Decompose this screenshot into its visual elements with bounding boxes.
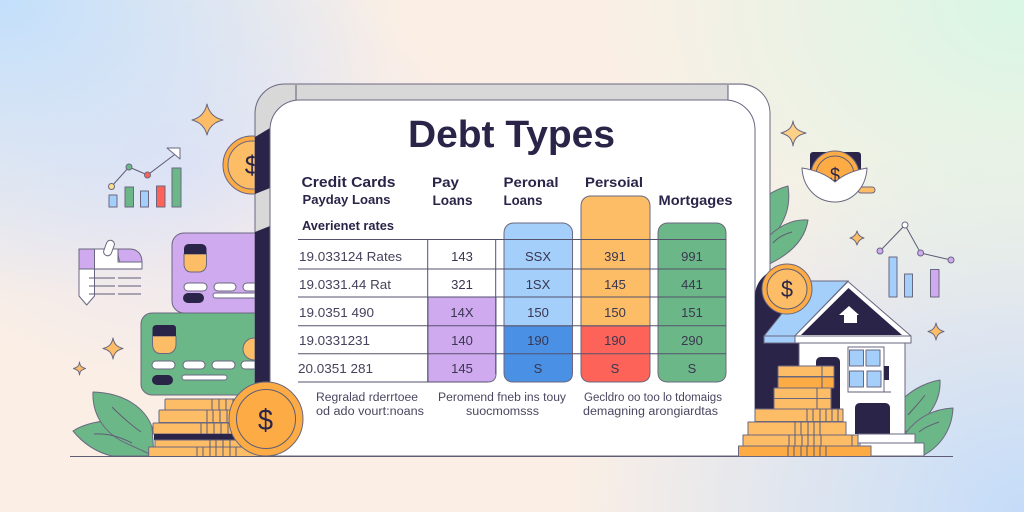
sparkle: left medium — [103, 338, 123, 359]
chart: left bars with trend arrow — [108, 148, 181, 207]
table column headers — [302, 174, 733, 233]
purple credit card — [172, 233, 282, 313]
footnote: left: od ado vourt:noans — [316, 406, 424, 418]
house gable — [795, 282, 911, 343]
table values: mortgages — [681, 249, 703, 376]
table values: pay loans: 14X — [450, 305, 474, 320]
leaves: right upper, behind panel — [760, 186, 808, 266]
table column headers: Credit Cards — [302, 175, 396, 191]
green credit card — [141, 313, 281, 395]
table values: personal: S — [611, 361, 620, 376]
house body — [799, 343, 905, 435]
icon: coin in bowl — [802, 151, 875, 202]
coin behind panel — [223, 136, 281, 194]
icon: notebook with pencil — [79, 239, 142, 305]
table column headers: Payday Loans — [302, 192, 390, 207]
footnote: right: Gecldro oo too lo tdomaigs — [584, 392, 722, 404]
sparkle: lower right — [928, 323, 944, 340]
table values: mortgages: 290 — [681, 333, 703, 348]
table values: mortgages: S — [688, 361, 697, 376]
table row labels: 19.0351 490 — [299, 305, 374, 320]
table values: mortgages: 991 — [681, 249, 703, 264]
table values: personal: 150 — [604, 305, 626, 320]
table row labels: 19.0331231 — [299, 333, 370, 348]
coin behind panel: $ — [245, 150, 260, 180]
footnote: right: demagning arongiardtas — [583, 406, 718, 418]
icon: coin in bowl: $ — [830, 165, 840, 187]
footnote: centre: Peromend fneb ins touy — [438, 392, 566, 404]
sparkle: top right — [781, 121, 806, 146]
footnote: centre — [438, 392, 566, 418]
table values: personal: 190 — [604, 333, 626, 348]
table values: personal loans: 150 — [527, 305, 549, 320]
table values: pay loans: 145 — [451, 361, 473, 376]
table column headers: Averienet rates — [302, 218, 394, 233]
leaves: bottom right — [905, 380, 953, 456]
table values: pay loans: 140 — [451, 333, 473, 348]
large dollar coin — [229, 382, 303, 456]
ground line — [70, 456, 953, 458]
footnote: right — [583, 392, 722, 418]
table values: personal loans: S — [534, 361, 543, 376]
table column headers: Peronal — [504, 174, 558, 190]
large dollar coin: $ — [258, 404, 273, 437]
house roof — [764, 281, 848, 343]
table values: mortgages: 441 — [681, 277, 703, 292]
footnote: left — [316, 392, 424, 418]
table values: mortgages: 151 — [681, 305, 703, 320]
footnote: left: Regralad rderrtoee — [316, 392, 418, 404]
table column headers: Pay — [432, 174, 459, 190]
table values: pay loans — [450, 249, 474, 376]
table values: pay loans: 143 — [451, 249, 473, 264]
table grid lines — [298, 240, 726, 382]
sparkle: left small — [74, 362, 86, 375]
back panel frame — [255, 84, 770, 400]
table column headers: Loans — [432, 192, 473, 208]
table row labels: 19.033124 Rates — [299, 249, 403, 264]
table values: personal loans — [525, 249, 551, 376]
table column headers: Loans — [504, 192, 543, 208]
table values: personal — [604, 249, 626, 376]
column highlight: blue — [504, 223, 572, 382]
table values: personal: 145 — [604, 277, 626, 292]
table column headers: Mortgages — [658, 192, 733, 208]
chart: right bars with line — [877, 222, 954, 297]
column highlight: orange and red — [581, 196, 650, 382]
coin stack: house — [738, 366, 871, 456]
main white panel — [270, 100, 755, 456]
house backdrop dark shape — [755, 268, 830, 418]
table values: personal loans: 1SX — [526, 277, 551, 292]
table values: personal loans: SSX — [525, 249, 551, 264]
sparkle: right small — [850, 231, 864, 245]
coin stack: bottom left — [149, 399, 269, 456]
dollar coin at house: $ — [781, 276, 793, 302]
leaves: bottom left — [73, 392, 154, 456]
table row labels — [298, 249, 403, 376]
table values: personal loans: 190 — [527, 333, 549, 348]
table values: pay loans: 321 — [451, 277, 473, 292]
table values: personal: 391 — [604, 249, 626, 264]
column highlight: green — [658, 223, 726, 382]
column highlight: purple — [428, 297, 496, 382]
table row labels: 19.0331.44 Rat — [299, 277, 391, 292]
dollar coin at house — [762, 264, 812, 314]
table column headers: Persoial — [585, 174, 643, 190]
footnote: centre: suocmomsss — [466, 406, 539, 418]
house steps — [858, 434, 924, 456]
sparkle: top left large — [192, 104, 223, 135]
title: Debt Types — [408, 114, 615, 156]
table row labels: 20.0351 281 — [298, 361, 373, 376]
